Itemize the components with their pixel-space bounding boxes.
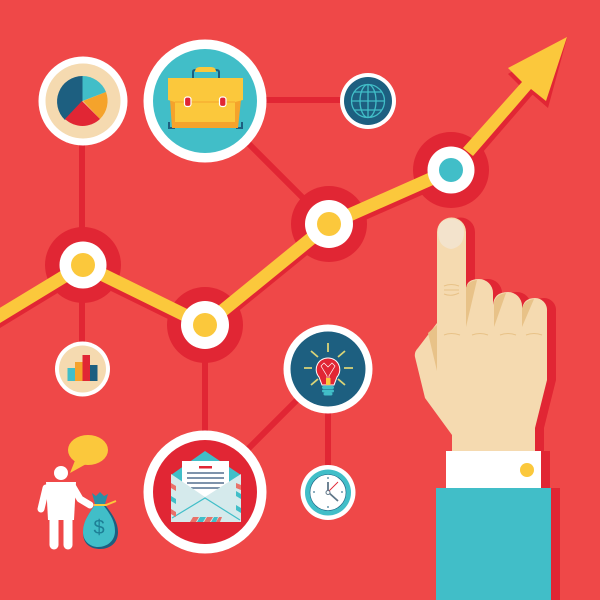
- icon: bar chart: [55, 342, 110, 396]
- chart node 3: [305, 200, 353, 248]
- shirt cuff: [446, 451, 541, 488]
- icon: money bag: $: [93, 517, 105, 539]
- icon: briefcase: [144, 40, 266, 162]
- icon: globe: [340, 73, 396, 129]
- icon: hand pointing: [415, 218, 547, 451]
- icon: speech bubble: [68, 435, 108, 473]
- connector lines: [82, 100, 368, 493]
- icon: light bulb: [284, 324, 372, 414]
- jacket sleeve: [436, 488, 551, 600]
- icon: businessman: [41, 466, 90, 545]
- node halos: [45, 132, 489, 363]
- chart node 4: [428, 146, 474, 194]
- chart node 1: [60, 242, 106, 288]
- trend line arrow: [0, 37, 567, 325]
- trend line shadow: [0, 38, 567, 330]
- icon: envelope: [144, 430, 266, 554]
- hand shadow: [424, 218, 560, 600]
- chart node 2: [181, 301, 229, 349]
- icon: money bag: [83, 492, 118, 549]
- icon: clock: [300, 465, 356, 520]
- icon: pie chart: [38, 56, 128, 146]
